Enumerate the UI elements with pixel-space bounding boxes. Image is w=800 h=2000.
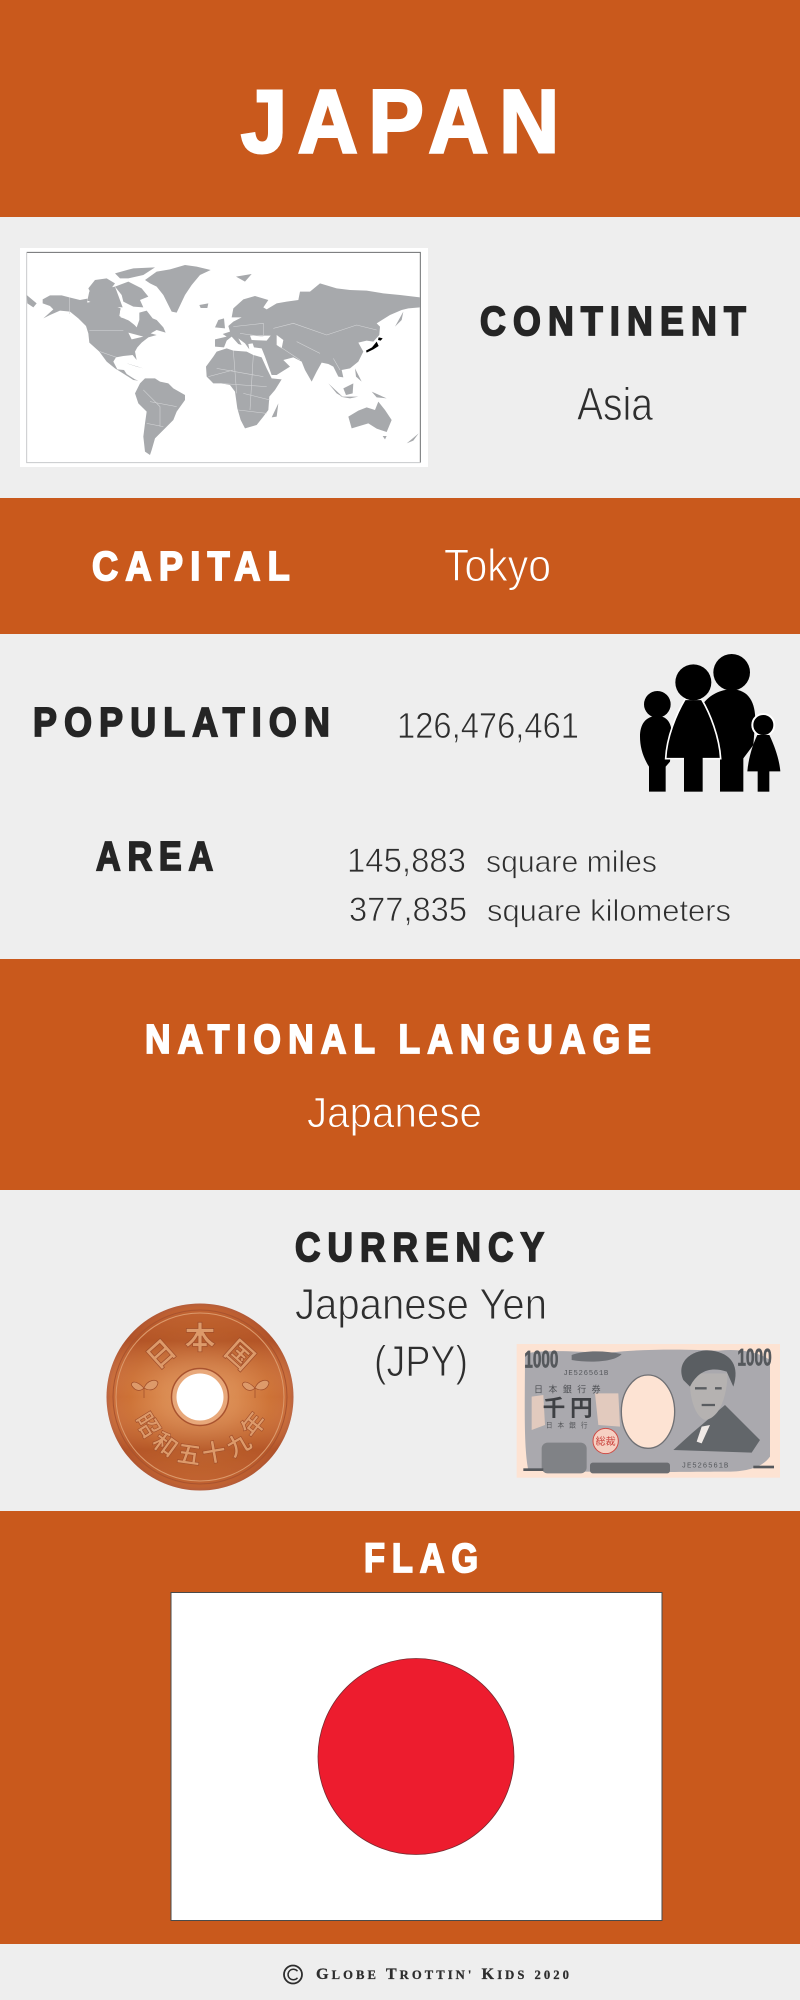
- icon: 1000 yen banknote: 日本銀行: [546, 1419, 588, 1429]
- panel: flag: [0, 1511, 800, 1944]
- icon: 1000 yen banknote: [517, 1344, 780, 1478]
- title: JAPAN: [241, 71, 570, 171]
- icon: 1000 yen banknote: 総裁: [596, 1433, 616, 1448]
- Australia: [348, 402, 392, 432]
- panel: currency: [0, 1190, 800, 1511]
- value: Japanese Yen: Japanese Yen: [295, 1280, 547, 1329]
- icon: 5 yen coin: 年: [231, 1403, 273, 1444]
- icon: 5 yen coin: 九: [219, 1422, 257, 1464]
- flag of Japan: [171, 1592, 662, 1920]
- Africa: [206, 348, 282, 428]
- Greenland: [145, 265, 211, 313]
- icon: 1000 yen banknote: 千円: [543, 1390, 593, 1423]
- panel: population and area: [0, 634, 800, 959]
- icon: 5 yen coin: 五: [175, 1434, 204, 1472]
- icon: 1000 yen banknote: JE526561B: [682, 1462, 729, 1470]
- value: Tokyo: Tokyo: [444, 540, 551, 591]
- icon: 1000 yen banknote: 日本銀行券: [534, 1382, 601, 1395]
- note value numerals: 1000: [737, 1345, 772, 1372]
- note value numerals: [524, 1345, 772, 1374]
- North America: [43, 295, 166, 381]
- icon: 1000 yen banknote: JE526561B: [563, 1370, 609, 1378]
- heading: continent: CONTINENT: [480, 298, 753, 344]
- Eurasia: [215, 283, 420, 382]
- icon: copyright: [284, 1966, 302, 1984]
- heading: currency: CURRENCY: [295, 1224, 551, 1270]
- value: square miles: [347, 842, 657, 880]
- panel: national language: [0, 959, 800, 1190]
- panel: capital: [0, 498, 800, 634]
- value: population: 126,476,461: [397, 705, 579, 746]
- islands: [272, 403, 278, 417]
- portrait: [673, 1350, 760, 1453]
- note value numerals: 1000: [524, 1347, 558, 1374]
- value: Japanese: Japanese: [307, 1089, 482, 1137]
- South America: [135, 378, 185, 455]
- heading: area: AREA: [96, 833, 220, 879]
- panel: continent: [0, 217, 800, 498]
- value: Asia: Asia: [577, 378, 653, 430]
- icon: 5 yen coin: 昭: [128, 1404, 170, 1443]
- value: square miles: square miles: [486, 844, 657, 879]
- icon: 5 yen coin: 和: [146, 1422, 186, 1464]
- value: JPY: (JPY): [374, 1337, 468, 1386]
- icon: 5 yen coin: 十: [199, 1431, 228, 1470]
- icon: family: [640, 654, 780, 792]
- value: square miles: 145,883: [347, 842, 466, 880]
- footer credit: GLOBE TROTTIN' KIDS 2020: [316, 1966, 572, 1983]
- value: square kilometers: [349, 891, 731, 929]
- value: square kilometers: 377,835: [349, 891, 467, 929]
- icon: 5 yen coin: 国: [217, 1330, 264, 1378]
- heading: flag: FLAG: [364, 1535, 485, 1581]
- heading: capital: CAPITAL: [92, 543, 297, 589]
- icon: 5 yen coin: 日: [137, 1329, 184, 1377]
- value: square kilometers: square kilometers: [487, 893, 731, 928]
- icon: 5 yen coin: [106, 1304, 294, 1490]
- panel: title band: [0, 0, 800, 217]
- icon: 5 yen coin: 本: [184, 1313, 216, 1358]
- heading: national language: NATIONAL LANGUAGE: [145, 1016, 658, 1062]
- heading: population: POPULATION: [33, 699, 337, 745]
- Japan highlight: [366, 337, 383, 353]
- footer: [0, 1944, 800, 2000]
- world map: [20, 248, 428, 467]
